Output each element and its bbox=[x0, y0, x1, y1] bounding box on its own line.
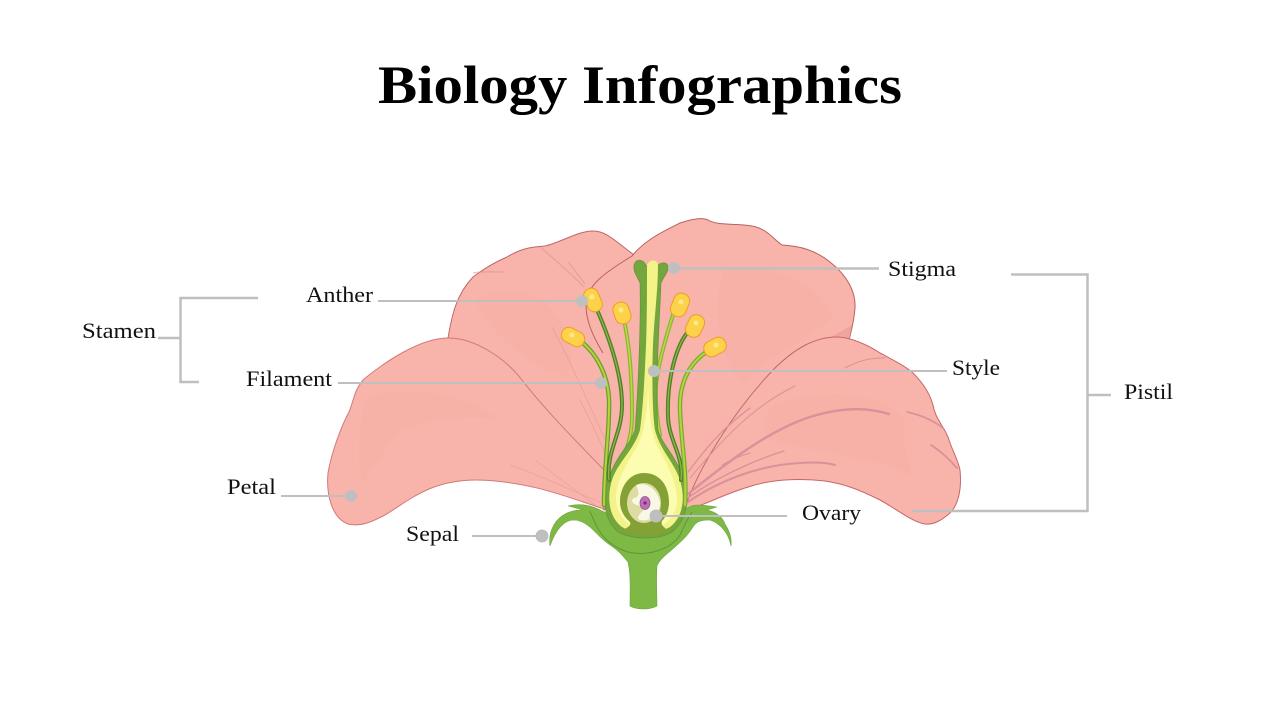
ovule bbox=[640, 496, 650, 510]
stamens bbox=[583, 312, 705, 505]
filaments behind pistil bbox=[625, 315, 673, 450]
title: Biology Infographics bbox=[378, 55, 902, 115]
callout: Ovary bbox=[650, 500, 861, 525]
callout: Filament: Filament bbox=[246, 366, 332, 391]
callout: Anther bbox=[306, 282, 588, 307]
callout: Stigma: Stigma bbox=[888, 256, 956, 281]
callout: Filament bbox=[246, 366, 607, 391]
anthers bbox=[559, 286, 729, 359]
callout: Petal bbox=[227, 474, 357, 502]
callout: Style bbox=[648, 355, 1000, 380]
sepals and stem bbox=[550, 505, 731, 609]
callout: Stigma bbox=[668, 256, 956, 281]
label: Stamen: Stamen bbox=[82, 318, 156, 343]
pistil: style and ovary bbox=[605, 260, 687, 538]
petal: front left bbox=[328, 338, 604, 525]
callout: Ovary: Ovary bbox=[802, 500, 861, 525]
ovary chamber bbox=[620, 473, 669, 536]
petal veins bbox=[688, 358, 957, 502]
flower illustration bbox=[328, 219, 961, 609]
callout: Petal: Petal bbox=[227, 474, 276, 499]
petal: back centre bbox=[586, 219, 855, 510]
petal: back left bbox=[448, 231, 640, 510]
bracket: stamen bbox=[158, 298, 258, 382]
callout: Sepal bbox=[406, 521, 548, 546]
callout: Anther: Anther bbox=[306, 282, 374, 307]
petal: front right bbox=[686, 337, 961, 524]
bracket: pistil bbox=[912, 274, 1111, 511]
callout: Sepal: Sepal bbox=[406, 521, 459, 546]
label: Pistil: Pistil bbox=[1124, 379, 1173, 404]
callout: Style: Style bbox=[952, 355, 1000, 380]
